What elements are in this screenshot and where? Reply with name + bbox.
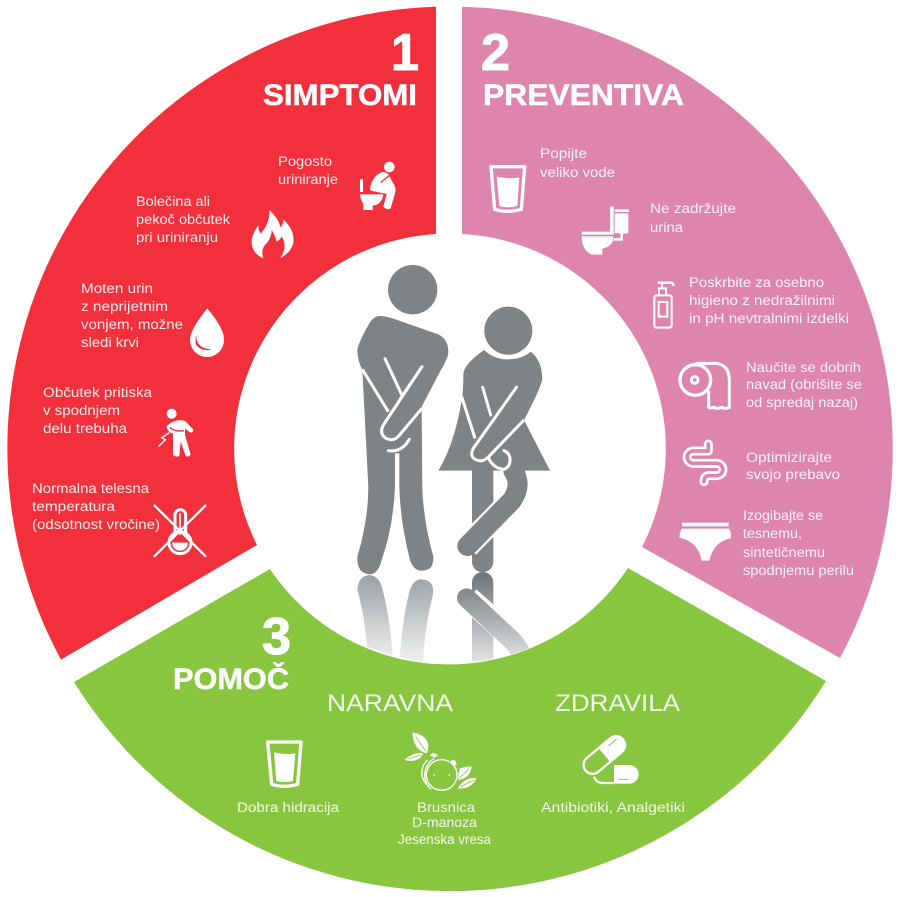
icon: crossed thermometer (154, 505, 206, 557)
text: bolecina: Bolečina ali (136, 194, 210, 210)
number 1: 1 (391, 24, 419, 82)
text: ne zadrzujte: urina (650, 220, 683, 236)
text: perilo: Izogibajte se (743, 508, 823, 524)
text: bolecina: pekoč občutek (136, 212, 231, 228)
panel: pomoc (74, 568, 826, 891)
text: higiena (689, 275, 849, 327)
text: prebava (746, 450, 840, 483)
text: ne zadrzujte (650, 201, 736, 236)
text: perilo: tesnemu, (743, 526, 802, 542)
text: navade: Naučite se dobrih (746, 360, 861, 376)
text: dobra hidracija: Dobra hidracija (237, 800, 339, 816)
icon: glass of water (491, 167, 525, 211)
text: perilo: spodnjemu perilu (743, 563, 854, 579)
text: brusnica: Jesenska vresa (398, 832, 491, 848)
text: moten urin: z neprijetnim (81, 299, 168, 315)
figure: woman (438, 307, 550, 572)
text: moten urin: vonjem, možne (81, 317, 183, 333)
text: temperatura: temperatura (32, 499, 115, 515)
text: prebava: Optimizirajte (746, 450, 832, 466)
heading: pomoc: POMOČ (173, 662, 289, 696)
text: brusnica: Brusnica (417, 800, 475, 816)
icon: person with abdominal pain (158, 409, 193, 457)
text: pogosto uriniranje: uriniranje (278, 172, 338, 188)
central figures (357, 265, 550, 667)
text: navade: od spredaj nazaj) (746, 395, 858, 411)
icon: cranberry with leaves (404, 732, 477, 790)
text: popijte: Popijte (540, 146, 587, 162)
text: ne zadrzujte: Ne zadržujte (650, 201, 736, 217)
number 2: 2 (481, 24, 510, 82)
text: pritisk (43, 385, 152, 437)
icon: glass of water (268, 742, 301, 786)
text: brusnica: D-manoza (412, 815, 477, 831)
text: pritisk: Občutek pritiska (43, 385, 152, 401)
text: temperatura (32, 481, 160, 533)
text: pritisk: v spodnjem (43, 403, 120, 419)
panel: simptomi (7, 7, 436, 660)
text: temperatura: Normalna telesna (32, 481, 149, 497)
text: bolecina (136, 194, 231, 246)
icon: flame (252, 210, 294, 258)
text: higiena: in pH nevtralnimi izdelki (689, 311, 849, 327)
text: brusnica (398, 800, 491, 848)
text: perilo: sintetičnemu (743, 545, 825, 561)
subheading: naravna: NARAVNA (327, 690, 453, 717)
panel: preventiva (462, 7, 893, 658)
text: perilo (743, 508, 854, 579)
text: pritisk: delu trebuha (43, 421, 127, 437)
icon: person on toilet (360, 162, 395, 210)
text: navade (746, 360, 862, 411)
text: higiena: Poskrbite za osebno (689, 275, 824, 291)
text: navade: navad (obrišite se (746, 377, 862, 393)
text: moten urin: sledi krvi (81, 335, 139, 351)
text: temperatura: (odsotnost vročine) (32, 517, 160, 533)
icon: toilet paper (680, 363, 729, 408)
icon: soap bottle (654, 283, 674, 328)
icon: capsules (580, 732, 639, 784)
text: bolecina: pri uriniranju (136, 230, 218, 246)
icon: toilet (582, 207, 629, 255)
text: antibiotiki: Antibiotiki, Analgetiki (541, 800, 685, 816)
text: pogosto uriniranje: Pogosto (278, 154, 332, 170)
icon: underwear (679, 523, 731, 561)
heading: simptomi: SIMPTOMI (263, 79, 417, 112)
subheading: zdravila: ZDRAVILA (555, 690, 680, 717)
text: higiena: higieno z nedražilnimi (689, 293, 835, 309)
icon: drop (190, 308, 224, 357)
heading: preventiva: PREVENTIVA (483, 79, 684, 112)
number 3: 3 (262, 608, 291, 666)
text: pogosto uriniranje (278, 154, 338, 188)
text: popijte (540, 146, 615, 181)
icon: intestines (687, 444, 723, 482)
figure reflections (357, 572, 530, 667)
text: popijte: veliko vode (540, 165, 615, 181)
text: moten urin: Moten urin (81, 281, 153, 297)
text: moten urin (81, 281, 183, 351)
text: prebava: svojo prebavo (746, 467, 840, 483)
figure: man (357, 265, 448, 574)
